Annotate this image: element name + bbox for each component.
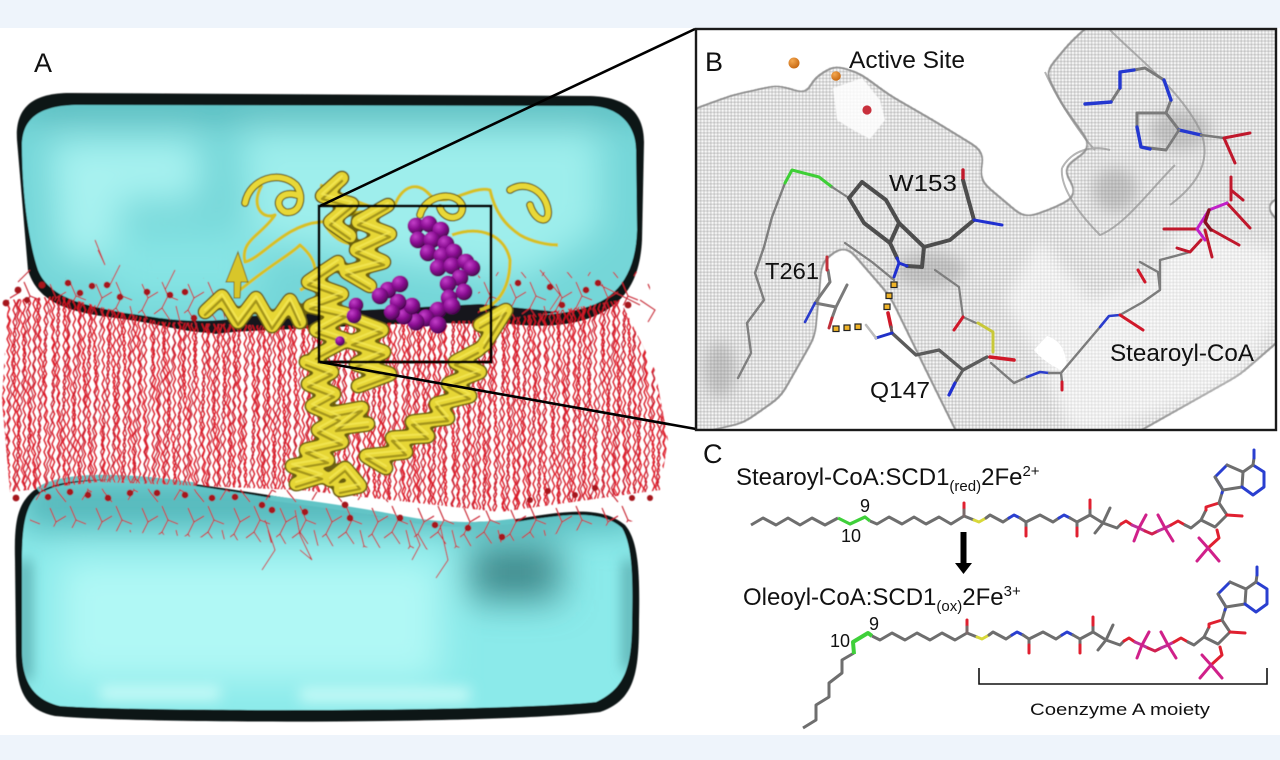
oleoyl label: 3+ bbox=[1004, 583, 1021, 600]
zoom line top bbox=[320, 29, 695, 206]
reaction arrow bbox=[955, 532, 972, 574]
label A: A bbox=[34, 48, 52, 78]
label W153: W153 bbox=[889, 170, 957, 196]
oleoyl label: 2Fe bbox=[962, 584, 1004, 611]
panel C: reaction bbox=[703, 439, 1267, 728]
label B: B bbox=[705, 47, 723, 77]
protein mesh surface bbox=[696, 30, 1276, 430]
active site white pocket bbox=[833, 78, 885, 139]
selection box bbox=[319, 206, 491, 362]
label 9 lower: 9 bbox=[869, 614, 879, 634]
lipid head groups, lower leaflet bbox=[13, 485, 653, 578]
label C: C bbox=[703, 439, 722, 469]
zoom line bottom bbox=[320, 362, 696, 429]
lighter mesh area lower right bbox=[1005, 230, 1276, 430]
oleoyl label: Oleoyl-CoA:SCD1 bbox=[743, 584, 936, 611]
W153 bbox=[849, 180, 974, 267]
label stearoyl-CoA: Stearoyl-CoA bbox=[1110, 340, 1254, 367]
stearoyl-CoA and residue sticks bbox=[738, 68, 1250, 395]
thioester bbox=[954, 317, 963, 330]
stearoyl-CoA structure bbox=[751, 450, 1264, 561]
Q147 bbox=[892, 333, 987, 370]
frame bbox=[696, 29, 1276, 430]
oleoyl-CoA structure bbox=[803, 567, 1267, 728]
lipid bilayer bbox=[2, 240, 668, 578]
label active site: Active Site bbox=[849, 47, 965, 74]
top band bbox=[0, 0, 1280, 28]
dark shadow beneath protein bbox=[160, 304, 560, 334]
white hole bbox=[1034, 336, 1066, 372]
label 10 upper: 10 bbox=[841, 526, 861, 546]
stearoyl-CoA purple spheres bbox=[335, 216, 480, 346]
label T261: T261 bbox=[765, 258, 819, 284]
panel B: active site detail bbox=[696, 29, 1276, 430]
panel A: membrane protein system bbox=[2, 93, 668, 722]
T261 bbox=[815, 270, 847, 318]
adenine bbox=[1111, 68, 1179, 150]
stearoyl label: (red) bbox=[949, 478, 981, 495]
top water box bbox=[17, 93, 644, 333]
hydrogen bonds bbox=[833, 282, 897, 332]
oleoyl label: (ox) bbox=[936, 598, 962, 615]
stearoyl label: 2+ bbox=[1022, 463, 1040, 480]
lipid head groups, upper leaflet bbox=[3, 240, 655, 326]
iron and oxygen atoms bbox=[788, 58, 872, 115]
green double bond bbox=[785, 170, 832, 187]
acyl chain thin bbox=[738, 183, 785, 378]
label 9 upper: 9 bbox=[860, 496, 870, 516]
bottom band bbox=[0, 735, 1280, 760]
protein ribbon bbox=[205, 176, 558, 493]
phosphates bbox=[1164, 133, 1250, 257]
stearoyl label: Stearoyl-CoA:SCD1 bbox=[736, 464, 949, 491]
label 10 lower: 10 bbox=[830, 631, 850, 651]
coenzyme A bracket bbox=[979, 668, 1267, 684]
coenzyme A label: Coenzyme A moiety bbox=[1030, 700, 1211, 719]
label Q147: Q147 bbox=[870, 377, 930, 403]
stearoyl label: 2Fe bbox=[981, 464, 1022, 491]
bottom water box bbox=[15, 477, 640, 722]
blob outline shading bbox=[1045, 30, 1205, 235]
panel frame background bbox=[696, 30, 1276, 430]
